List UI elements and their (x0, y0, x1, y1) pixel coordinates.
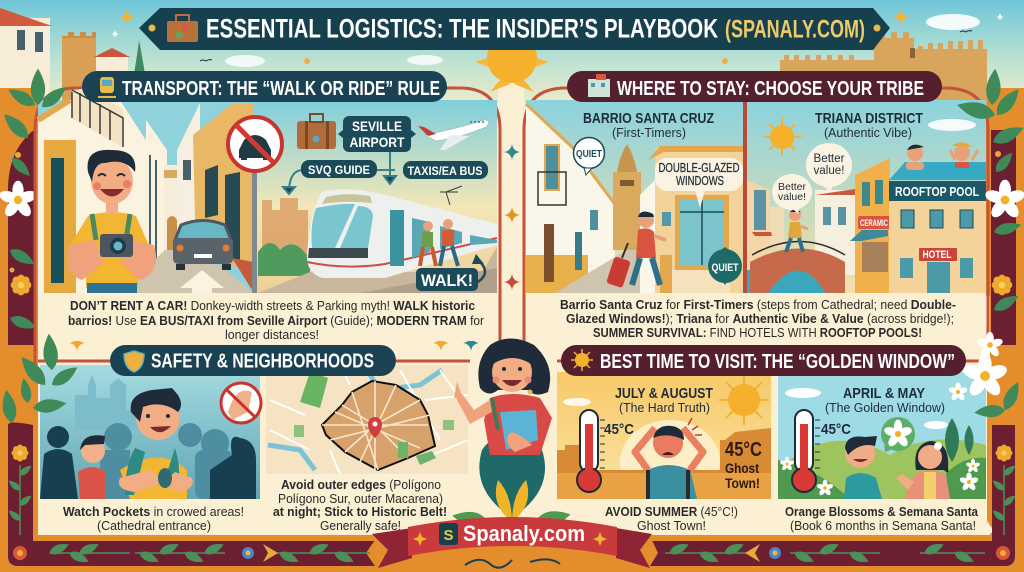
ribbon: Spanaly.com (372, 517, 652, 568)
Santa Cruz scene: BARRIO SANTA CRUZ (583, 110, 714, 127)
icon: no cars sign (228, 117, 282, 293)
panel: where to stay (524, 71, 988, 345)
label: Seville Airport (338, 116, 416, 152)
Triana scene: TRIANA DISTRICT (815, 110, 923, 127)
safety heading: SAFETY & NEIGHBORHOODS (151, 350, 374, 372)
panel: best time (557, 345, 986, 533)
icon: hotel (588, 74, 610, 97)
spring scene (778, 372, 986, 499)
laurel leaves top left (0, 69, 69, 143)
hotel facade (648, 146, 743, 293)
child (78, 435, 106, 499)
right castle wall (780, 32, 987, 109)
badge: quiet: QUIET (712, 262, 739, 274)
tram (307, 186, 497, 278)
neighbourhood map (266, 365, 468, 474)
icon: shield (124, 351, 144, 372)
bubble: better value large (806, 143, 852, 192)
lower frame: left and bottom borders (8, 360, 1016, 566)
left side floral column (0, 130, 38, 345)
best time caption: spring: (Book 6 months in Semana Santa! (790, 519, 976, 533)
best time caption: summer: AVOID SUMMER (45°C!) (605, 505, 738, 519)
label: Seville Airport: SEVILLE (352, 118, 402, 134)
transport heading (82, 71, 447, 102)
spring scene: APRIL & MAY (843, 385, 925, 402)
left town skyline (0, 8, 146, 118)
bubble: blossom (881, 417, 915, 452)
icon: airport suitcase (297, 114, 336, 149)
transport street scene (38, 88, 254, 293)
stay caption: Barrio Santa Cruz for First-Timers (steps from Cathedral; need Double- (560, 298, 956, 312)
Giralda tower (613, 144, 641, 250)
right side floral column (984, 130, 1024, 345)
panel: transport (35, 71, 500, 366)
red blouse (484, 394, 552, 455)
Triana scene (747, 100, 986, 293)
bubble: double-glazed: DOUBLE-GLAZED (658, 161, 740, 175)
best time heading (561, 345, 966, 376)
icon: no pickpockets (221, 383, 261, 423)
transport caption: barrios! Use EA BUS/TAXI from Seville Airport (Guide); MODERN TRAM for (68, 314, 484, 328)
transport airport scene (228, 100, 497, 293)
safety caption: edges: Polígono Sur, outer Macarena) (278, 492, 443, 506)
best time caption: spring: Orange Blossoms & Semana Santa (785, 505, 979, 519)
Triana scene: (Authentic Vibe) (824, 126, 912, 140)
stay caption (526, 293, 986, 340)
safety caption: pockets: Watch Pockets in crowed areas! (63, 505, 244, 519)
summer scene: Town! (725, 475, 760, 491)
thermometer spring (792, 410, 820, 492)
logo: S (443, 527, 454, 544)
head and hair (478, 338, 550, 395)
summer scene (557, 372, 771, 504)
label: SVQ guide (301, 160, 377, 178)
best time caption: spring (785, 505, 979, 533)
ribbon: Spanaly.com: Spanaly.com (463, 521, 585, 546)
summer scene: 45°C (604, 421, 634, 438)
safety caption: edges: Avoid outer edges (Polígono (281, 478, 441, 492)
spring scene: 45°C (821, 421, 851, 438)
summer scene: (The Hard Truth) (619, 400, 710, 415)
rooftop hotel (889, 142, 986, 293)
safety caption: pockets (63, 505, 244, 533)
transport caption (38, 293, 498, 342)
badge: quiet (708, 247, 742, 285)
rooftop hotel: HOTEL (922, 249, 952, 261)
label: taxis: TAXIS/EA BUS (408, 164, 482, 178)
bubble: better value small: value! (778, 191, 806, 203)
bubble: better value small: Better (778, 181, 807, 193)
icon: sun badge (571, 349, 593, 371)
plane (418, 120, 489, 150)
icon: sun (763, 118, 801, 156)
pointing arm (456, 394, 492, 424)
young woman (896, 441, 950, 499)
balcony (72, 88, 123, 147)
safety caption: edges (273, 478, 447, 533)
transport caption: DON’T RENT A CAR! Donkey-width streets & Parking myth! WALK historic (70, 299, 475, 313)
spring scene: (The Golden Window) (825, 400, 945, 415)
stay caption: SUMMER SURVIVAL: FIND HOTELS WITH ROOFTOP POOLS! (593, 326, 922, 340)
Santa Cruz scene (526, 100, 743, 293)
presenter woman with book (451, 338, 572, 529)
ceramic shop: CERAMIC (860, 218, 888, 228)
white blossoms right (948, 332, 1023, 419)
green dress base (479, 440, 545, 518)
lower laurel left (0, 333, 81, 424)
safety caption: edges: Generally safe! (320, 519, 401, 533)
overheated traveler (635, 418, 703, 499)
tourist with camera (67, 150, 156, 293)
bubble: quiet (574, 138, 604, 175)
bubble: better value large: Better (814, 153, 845, 165)
bubble: better value large: value! (814, 165, 844, 177)
bridge and water (747, 242, 845, 293)
tourist guarding pockets (119, 388, 193, 499)
title banner: ESSENTIAL LOGISTICS: THE INSIDER’S PLAYBOOK (206, 14, 718, 44)
car (173, 220, 233, 270)
book (500, 410, 538, 450)
arrow: street (180, 270, 224, 293)
icon: suitcase (167, 15, 198, 42)
walking couple (420, 219, 458, 266)
stay heading (567, 71, 942, 102)
title banner: (SPANALY.COM) (725, 16, 865, 44)
safety caption: edges: at night; Stick to Historic Belt! (273, 505, 447, 519)
best time caption: summer: Ghost Town! (637, 519, 706, 533)
sun behind title (475, 33, 549, 92)
safety caption: pockets: (Cathedral entrance) (97, 519, 211, 533)
map pin (368, 417, 382, 438)
thermometer hot (577, 410, 605, 492)
bubble: quiet: QUIET (576, 148, 602, 160)
bubble: double-glazed (655, 158, 743, 208)
ceramic shop (850, 158, 890, 293)
stay heading: WHERE TO STAY: CHOOSE YOUR TRIBE (617, 78, 924, 100)
walk label (416, 254, 485, 291)
logo (439, 523, 458, 545)
summer scene: JULY & AUGUST (615, 385, 713, 402)
bottom vine left (48, 541, 370, 565)
stay caption: Glazed Windows!); Triana for Authentic Vibe & Value (across bridge!); (566, 312, 954, 326)
transport caption: longer distances! (225, 328, 319, 342)
transport heading: TRANSPORT: THE “WALK OR RIDE” RULE (122, 78, 440, 100)
icon: hot sun (719, 375, 769, 425)
label: SVQ guide: SVQ GUIDE (308, 163, 370, 177)
bubble: better value small (772, 174, 812, 214)
safety heading (110, 345, 396, 376)
rooftop hotel: ROOFTOP POOL (895, 184, 979, 199)
bubble: double-glazed: WINDOWS (676, 174, 724, 188)
summer scene: 45°C (725, 439, 762, 461)
bottom vine right (665, 541, 985, 565)
traveler with suitcase (606, 212, 666, 288)
Santa Cruz scene: (First-Timers) (612, 126, 686, 140)
side vines (8, 464, 1016, 535)
laurel leaves top right (955, 68, 1024, 148)
title banner (139, 8, 890, 50)
crowd scene (40, 365, 261, 499)
best time caption: summer (605, 505, 738, 533)
summer scene: Ghost (725, 460, 759, 476)
label: Seville Airport: AIRPORT (350, 134, 405, 150)
icon: tram (98, 77, 116, 97)
walk label: WALK! (421, 271, 473, 290)
panel: safety (40, 345, 468, 533)
walker on bridge (786, 209, 808, 252)
young man (844, 436, 882, 499)
connector arrows (283, 152, 396, 194)
